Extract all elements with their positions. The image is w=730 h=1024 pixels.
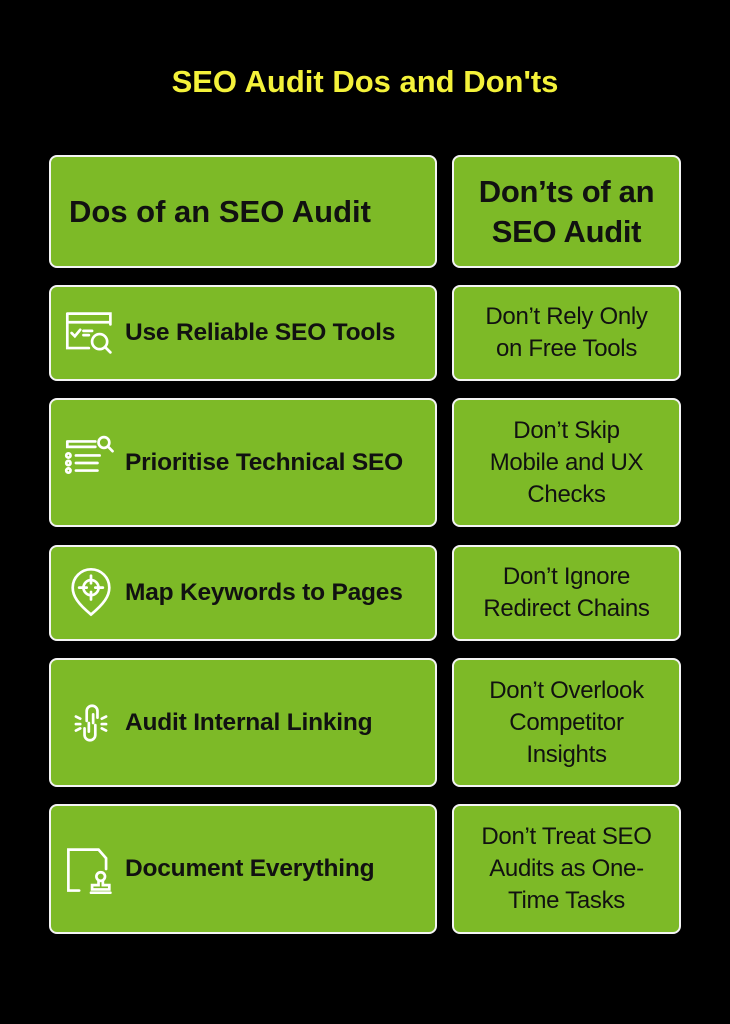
dont 2: Don’t Skip [513,416,620,444]
icon: browser search [66,312,112,354]
title: SEO Audit Dos and Don'ts [172,64,558,99]
dont 3: Redirect Chains [483,595,650,622]
header: don'ts: SEO Audit [492,214,641,248]
do 1 [49,285,437,381]
dont 2: Checks [527,480,606,508]
do 1: Use Reliable SEO Tools [125,319,395,346]
header: don'ts [452,155,681,268]
do 3: Map Keywords to Pages [125,579,403,606]
dont 4: Competitor [509,708,624,736]
icon: broken link [74,704,108,742]
dont 5: Audits as One- [489,855,644,882]
dont 1: on Free Tools [496,335,637,362]
dont 3 [452,545,681,641]
icon: map pin target [71,568,111,616]
header: don'ts: Don’ts of an [479,174,654,208]
dont 2 [452,398,681,527]
do 4: Audit Internal Linking [125,708,372,736]
icon: list search [64,436,114,474]
dont 5: Don’t Treat SEO [481,823,652,850]
do 2 [49,398,437,527]
do 2: Prioritise Technical SEO [125,448,403,476]
icon: document stamp [67,848,112,894]
dont 1 [452,285,681,381]
dont 2: Mobile and UX [490,448,643,476]
dont 5: Time Tasks [508,887,625,914]
do 3 [49,545,437,641]
dont 4: Don’t Overlook [489,676,644,704]
dont 4 [452,658,681,787]
do 5 [49,804,437,934]
dont 3: Don’t Ignore [503,563,630,590]
do 5: Document Everything [125,855,374,882]
dont 5 [452,804,681,934]
dont 1: Don’t Rely Only [485,303,648,330]
header: dos: Dos of an SEO Audit [69,194,371,228]
header: dos [49,155,437,268]
dont 4: Insights [526,740,607,768]
do 4 [49,658,437,787]
